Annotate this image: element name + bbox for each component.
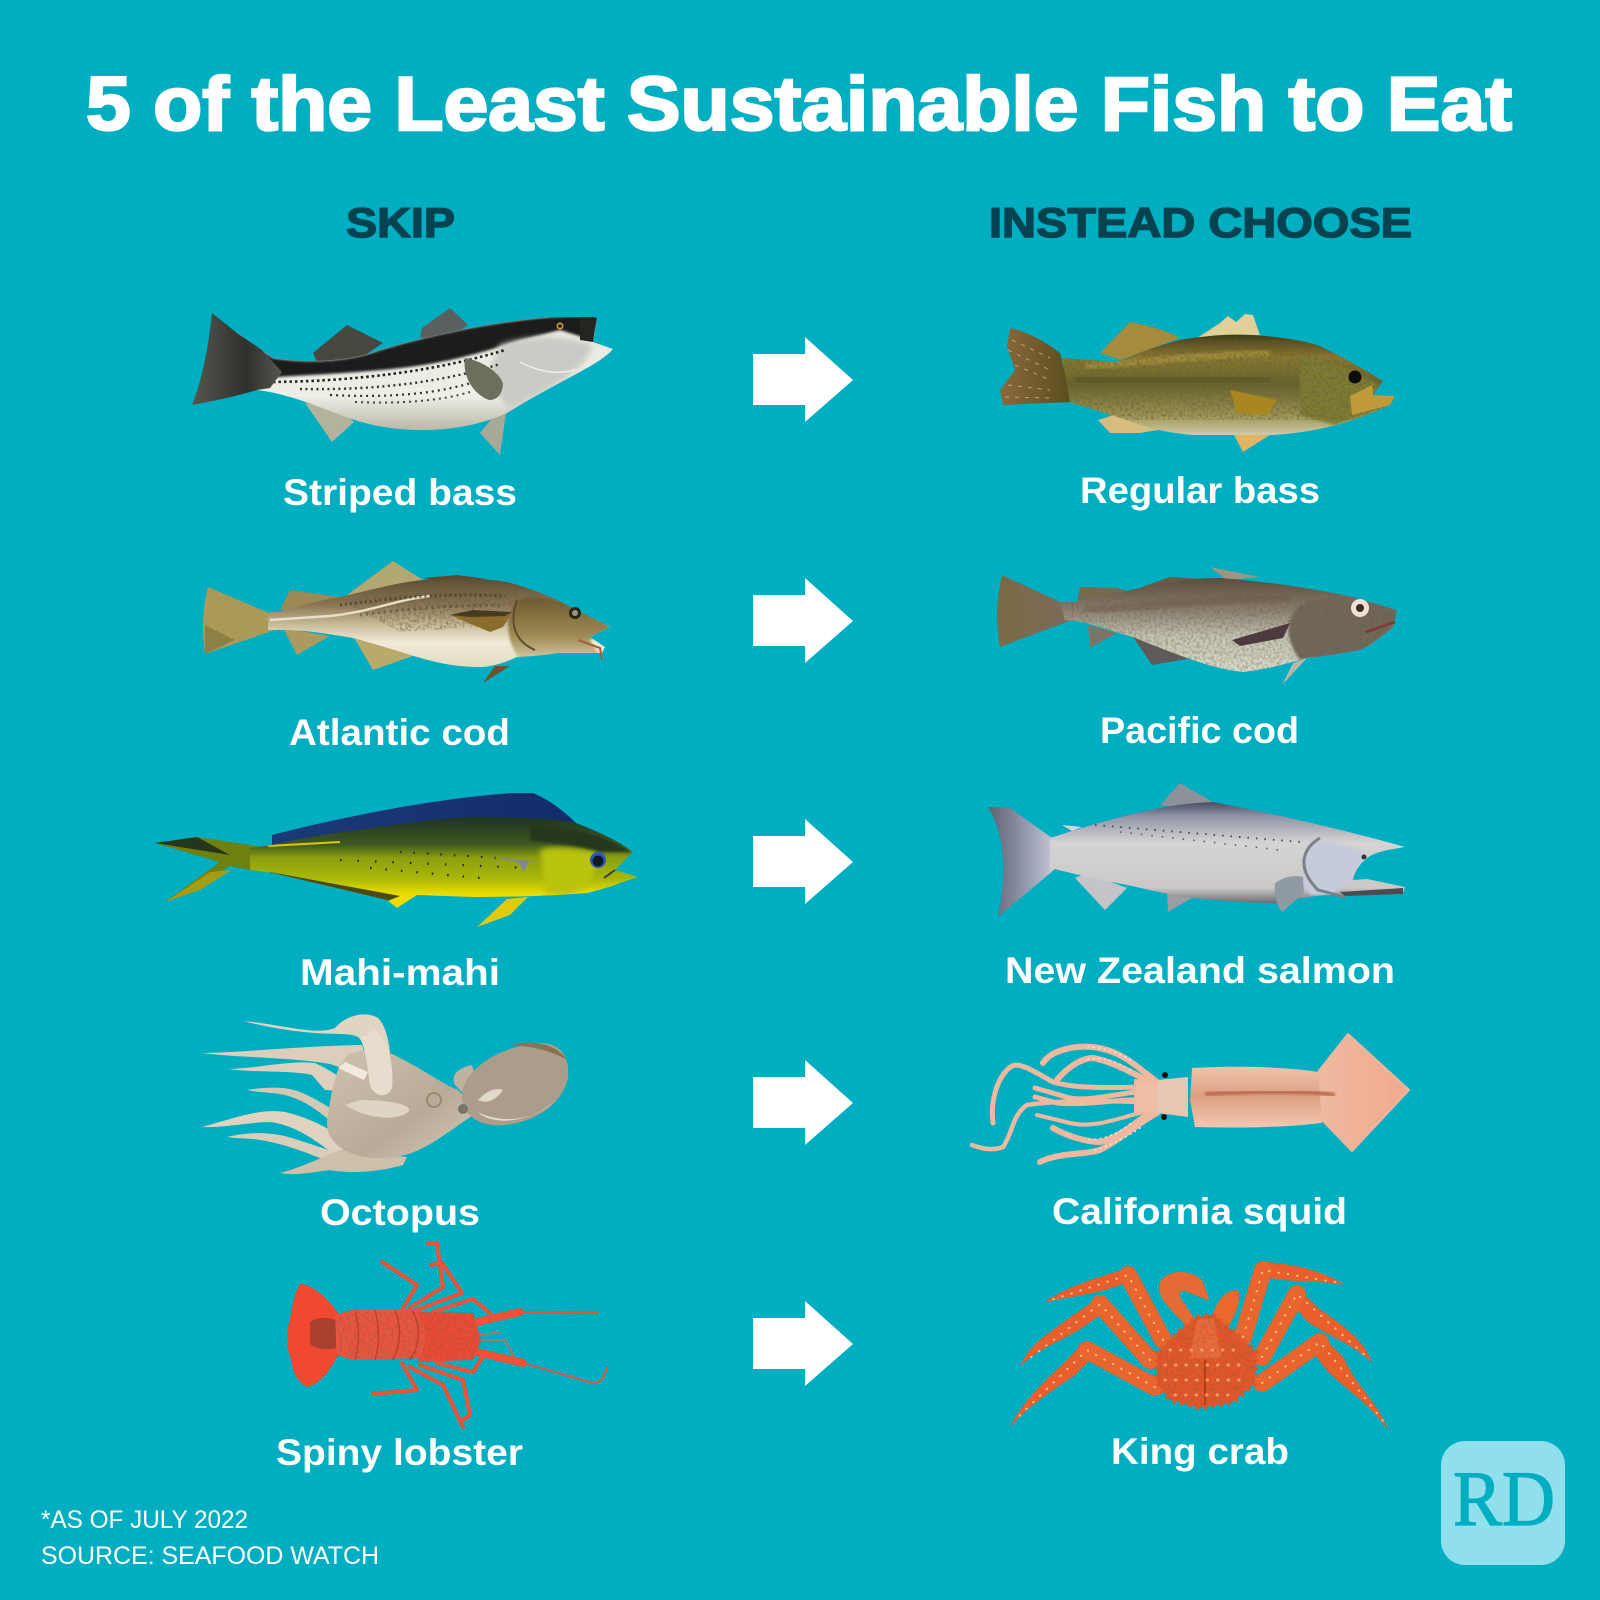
panel: skip column (155, 199, 638, 1473)
label: new zealand salmon: New Zealand salmon (1005, 950, 1395, 991)
label: atlantic cod: Atlantic cod (289, 712, 510, 753)
logo: RD (1441, 1441, 1565, 1565)
label: spiny lobster: Spiny lobster (276, 1432, 523, 1473)
label: striped bass: Striped bass (283, 472, 517, 513)
arrow: row 5 (753, 1301, 853, 1386)
photo: pacific cod (997, 567, 1400, 685)
photo: regular bass (1000, 314, 1395, 452)
photo: spiny lobster (287, 1243, 607, 1427)
arrow: row 4 (753, 1060, 853, 1145)
heading: skip: SKIP (346, 199, 455, 246)
photo: octopus (202, 1014, 568, 1174)
label: octopus: Octopus (320, 1192, 480, 1233)
photo: striped bass (192, 308, 613, 455)
logo: RD: RD (1453, 1455, 1555, 1542)
arrow: row 2 (753, 578, 853, 663)
label: pacific cod: Pacific cod (1100, 710, 1299, 751)
label: king crab: King crab (1111, 1431, 1289, 1472)
photo: mahi-mahi (155, 793, 638, 927)
footnote: date and source: SOURCE: SEAFOOD WATCH (41, 1542, 379, 1570)
photo: california squid (972, 1034, 1409, 1162)
title: 5 of the Least Sustainable Fish to Eat (86, 62, 1512, 147)
panel: instead choose column (972, 199, 1412, 1472)
photo: king crab (1010, 1261, 1388, 1430)
label: regular bass: Regular bass (1080, 470, 1320, 511)
photo: new zealand salmon (988, 783, 1405, 917)
footnote: date and source (41, 1506, 379, 1570)
footnote: date and source: *AS OF JULY 2022 (41, 1506, 248, 1534)
arrows (753, 337, 853, 1386)
label: mahi-mahi: Mahi-mahi (300, 952, 500, 993)
heading: instead choose: INSTEAD CHOOSE (989, 199, 1412, 246)
photo: atlantic cod (203, 561, 612, 683)
label: california squid: California squid (1052, 1191, 1347, 1232)
arrow: row 1 (753, 337, 853, 422)
arrow: row 3 (753, 819, 853, 904)
